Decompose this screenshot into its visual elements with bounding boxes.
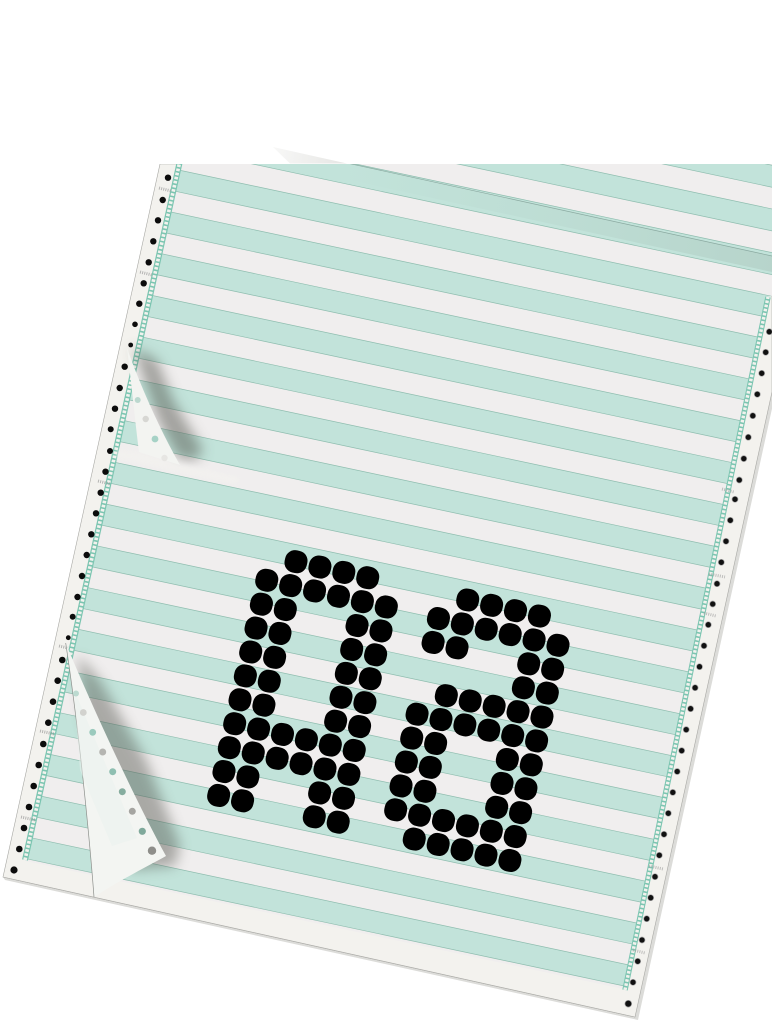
left sprocket holes — [10, 174, 171, 874]
upper page curl shadow — [133, 347, 203, 460]
bottom white margin — [3, 876, 635, 1017]
white stripes base — [182, 164, 772, 296]
dot-matrix letter a — [377, 581, 577, 874]
left sprocket strip — [25, 163, 180, 860]
right sprocket strip — [625, 297, 768, 990]
lower page curl shadow — [78, 655, 180, 870]
curl holes — [73, 690, 156, 855]
right sprocket holes — [625, 329, 772, 1007]
lower page curl — [66, 643, 166, 897]
left margin tiny print marks — [21, 188, 171, 820]
dot-matrix letter A — [205, 543, 405, 836]
fold in upper sheet — [340, 163, 772, 272]
upper seam white band — [114, 448, 120, 460]
right margin tiny print marks — [633, 489, 734, 953]
paper edge shadow — [4, 394, 772, 1020]
upper page curl — [127, 348, 180, 465]
green stripes — [28, 164, 772, 986]
faint paper sliver above top edge — [273, 147, 347, 164]
